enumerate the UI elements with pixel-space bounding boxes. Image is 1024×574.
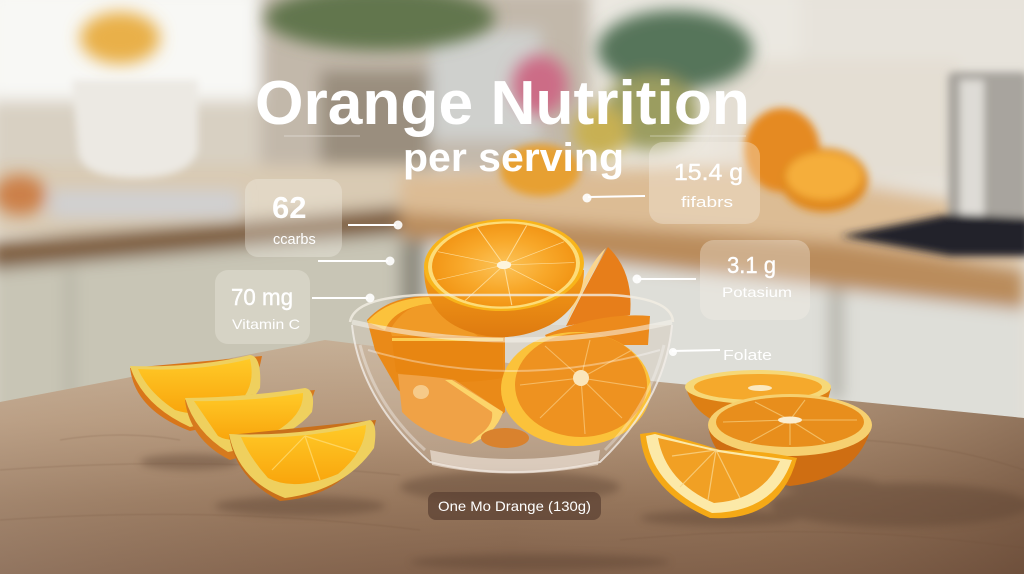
subheading: per serving: per serving [403,136,624,180]
serving size pill [428,492,601,520]
glass bowl with oranges [350,216,673,473]
oranges: right group [640,370,872,518]
callout: potassium: 3.1 g [727,252,776,278]
large right slice [501,332,651,446]
wooden table [0,340,1024,574]
callout: calories: 62 [272,190,306,225]
title [255,69,750,180]
callout: folate: Folate [723,347,772,364]
back half orange [685,370,831,430]
callout: fiber: fifabrs [681,194,733,211]
wedge 3 [229,420,376,501]
wedge 1 [130,355,262,431]
plants and fruit in background [0,0,753,218]
bottom piece [481,428,529,448]
callout: fiber [582,142,760,224]
callout: calories: ccarbs [273,232,316,248]
heading: Orange Nutrition: Orange Nutrition [255,69,750,138]
orange slices inside bowl [367,216,651,448]
wedge 2 [185,388,315,460]
oranges: left wedges [130,355,376,501]
wood grain [0,435,1024,548]
callout: vitamin C [215,270,374,344]
right wedge behind top half [566,247,631,326]
left slices [367,296,505,440]
shadows on table [140,454,1024,570]
lower left slice [398,374,503,444]
front wedge [640,432,797,518]
callout: vitamin C: Vitamin C [232,316,300,332]
title rules [284,135,746,137]
back slice [545,315,650,345]
callout: potassium: Potasium [722,284,792,300]
callout: potassium [632,240,810,320]
callout: folate [669,347,772,364]
glass bottom fill [352,325,672,471]
serving size pill: One Mo Drange (130g) [438,498,591,514]
callout: vitamin C: 70 mg [231,284,293,310]
front half orange [708,394,872,486]
top half orange [422,216,586,337]
connector: unlabeled [318,256,394,266]
glass body [350,295,673,474]
callout: calories [245,179,402,257]
callout: fiber: 15.4 g [674,159,743,185]
